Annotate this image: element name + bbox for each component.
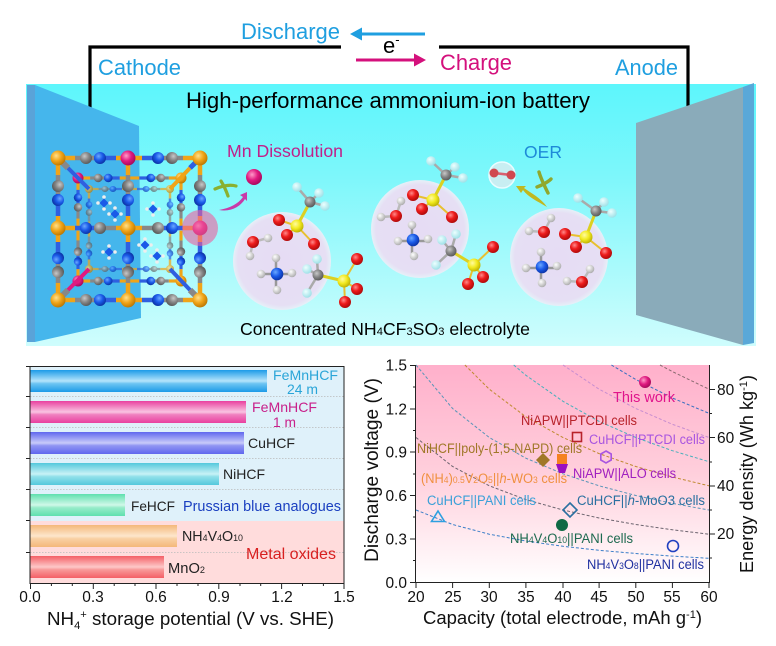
iso-energy curves [416,365,709,558]
separators [30,396,344,552]
scatter labels [417,390,705,572]
OER label: OER [524,142,562,162]
bar labels: FeMnHCF [273,367,338,383]
left tick labels: 0.0 [385,575,407,592]
bar labels: FeMnHCF [252,399,317,415]
middle cage [72,172,186,286]
scatter labels: NiAPW||ALO cells [573,466,676,481]
Mn dissolution label: Mn Dissolution [227,141,343,161]
marker: NH4 V2O5 WO3 [557,454,567,464]
chart background regions [30,366,344,583]
bottom axis title: -1 [686,609,696,621]
title: High-performance ammonium-ion battery [186,88,590,113]
electrolyte background tank [26,84,756,346]
bar: NiHCF [30,463,219,485]
plot background [416,365,709,582]
scatter labels: NH4V3O8||PANI cells [587,557,704,572]
arrow: Mn leaving [219,192,247,210]
bar labels: NiHCF [223,466,265,482]
left axis title: Discharge voltage (V) [362,378,383,562]
oxygen bubble [489,162,516,188]
marker: CuHCF PANI [432,511,444,522]
bottom tick labels: 60 [700,589,718,606]
anode label: Anode [615,55,678,80]
bar labels [131,367,341,577]
Prussian blue analogue crystal [50,150,218,308]
outer cage [50,150,208,308]
left tick labels: 0.3 [385,532,407,548]
bar: FeMnHCF 1 m [30,401,246,423]
bottom axis title: Capacity (total electrode, mAh g [423,607,686,628]
scatter chart: voltage vs capacity [362,358,757,628]
scatter labels: (NH4)0.5V2O5||h-WO3 cells [421,471,567,486]
right tick labels [717,382,735,543]
x tick labels: 1.2 [271,589,293,606]
x axis title: NH [47,608,74,629]
x tick labels: 0.9 [208,589,230,606]
bottom tick labels [407,589,718,606]
bottom tick labels: 40 [554,589,572,606]
axes and ticks [30,366,344,584]
right axis title: -1 [738,381,750,391]
x tick labels: 0.3 [82,589,104,606]
marker: CuHCF MoO3 [563,503,577,517]
scatter labels: CuHCF||PTCDI cells [589,432,705,447]
bar labels: FeHCF [131,498,175,514]
x tick labels: 0.0 [19,589,41,606]
x tick labels: 0.6 [145,589,167,606]
external circuit wire [90,47,688,108]
electron symbol: - [395,32,400,47]
bottom tick labels: 35 [517,589,535,606]
bottom tick labels: 30 [480,589,498,606]
left tick labels: 0.6 [385,488,407,505]
marker: CuHCF PTCDI [601,451,611,463]
marker: NiAPW ALO [556,464,568,473]
bar labels: Prussian blue analogues [183,499,341,515]
x tick labels [19,589,355,606]
Mn ion [246,169,262,185]
scatter labels: CuHCF||PANI cells [427,493,536,508]
bottom tick labels: 50 [627,589,645,606]
marker: NiHCF poly-NAPD [536,453,550,467]
right tick labels: 20 [717,526,735,543]
x axis title: + [80,609,87,621]
charge label and arrow: Charge [440,50,512,75]
left tick labels: 1.2 [385,402,407,418]
x axis title: storage potential (V vs. SHE) [87,608,334,629]
manganese dissolution glow [182,210,218,246]
cathode label: Cathode [98,55,181,80]
anode plate [636,83,754,345]
bottom tick labels: 55 [663,589,681,606]
bar labels: Metal oxides [246,546,336,563]
scatter labels: NiHCF||poly-(1,5-NAPD) cells [417,441,582,456]
solvation sphere 1 [233,182,363,310]
bar labels: CuHCF [248,435,295,451]
bar labels: 24 m [287,381,318,397]
inner cage [85,185,174,273]
bottom tick labels: 45 [590,589,608,606]
bottom tick labels: 20 [407,589,425,606]
right axis title: Energy density (Wh kg [737,392,757,573]
bar: NH4V4O10 [30,525,177,547]
bar: FeMnHCF 24 m [30,370,267,392]
x tick labels: 1.5 [333,589,355,606]
marker: NiAPW PTCDI [572,432,582,442]
left tick labels [385,358,407,592]
scatter labels: NiAPW||PTCDI cells [521,413,637,428]
electron symbol: e [383,33,395,58]
charge label and arrow [356,50,512,75]
right tick labels: 40 [717,478,735,495]
icon: green blocked cross left [215,181,236,196]
discharge label and arrow: Discharge [241,19,340,44]
scatter labels: CuHCF||h-MoO3 cells [577,493,705,508]
bar labels: MnO2 [168,561,205,577]
bar: FeHCF [30,494,125,516]
bottom axis title: ) [696,607,702,628]
right tick labels: 80 [717,382,735,399]
right axis title: ) [737,375,757,381]
right tick labels: 60 [717,430,735,447]
marker: NH4V4O10 PANI [556,519,568,531]
bar labels: NH4V4O10 [182,529,243,545]
solvation sphere 3 [510,193,617,306]
bar chart: storage potential [19,366,355,632]
x axis title: 4 [74,620,80,632]
marker: NH4V3O8 PANI [668,540,678,552]
bar: MnO2 [30,556,164,578]
bar labels: 1 m [273,414,296,430]
icon: green blocked cross right [537,172,551,193]
scatter axes and ticks [410,365,715,588]
cathode plate [27,85,141,342]
electrolyte label: Concentrated NH4CF3SO3 electrolyte [240,319,530,339]
left tick labels: 0.9 [385,444,407,462]
ammonium ions in cage [96,195,165,264]
marker: this work [639,376,651,388]
scatter labels: This work [613,390,676,406]
left tick labels: 1.5 [385,358,407,374]
cage diagonals [58,158,200,300]
scatter labels: NH4V4O10||PANI cells [510,531,633,546]
bottom tick labels: 25 [444,589,462,606]
discharge label and arrow [241,19,425,44]
bar: CuHCF [30,432,244,454]
arrow: oxygen evolution [516,186,547,207]
solvation sphere 2 [371,156,499,290]
